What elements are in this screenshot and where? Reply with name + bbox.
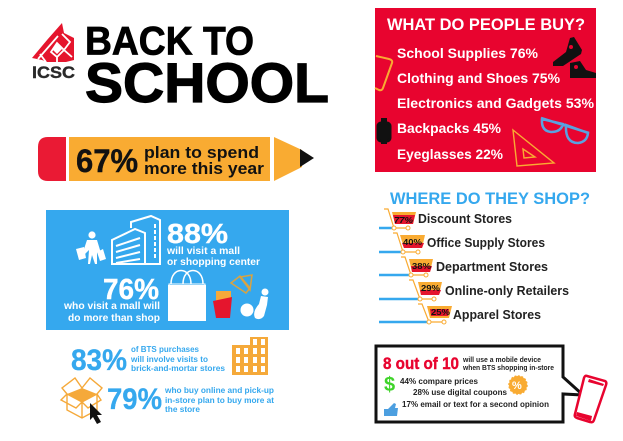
title: SCHOOL: [85, 51, 329, 114]
stat: 76%: [63, 274, 160, 324]
list of purchases: [397, 46, 594, 162]
icon: mall building: [112, 216, 160, 264]
title: [85, 20, 329, 114]
row: office supply stores 40%: [379, 233, 545, 254]
stat: 76%: do more than shop: [68, 312, 160, 324]
pencil: 67% plan to spend more this year: [38, 137, 314, 181]
icon: sneakers: [553, 37, 596, 78]
list of purchases: Backpacks 45%: [397, 121, 501, 136]
logo: ICSC: ICSC: [32, 63, 75, 82]
row: department stores 38%: Department Stores: [436, 260, 548, 274]
list of purchases: Clothing and Shoes 75%: [397, 71, 560, 86]
list of purchases: School Supplies 76%: [397, 46, 538, 61]
pencil: 67% plan to spend more this year: more this year: [144, 159, 264, 178]
row: office supply stores 40%: Office Supply Stores: [427, 236, 545, 250]
stat: 76%: 76%: [103, 274, 159, 306]
heading: WHAT DO PEOPLE BUY?: [387, 15, 585, 34]
stat: 83%: [71, 344, 225, 377]
row: discount stores 77%: Discount Stores: [418, 212, 512, 226]
pencil: 67% plan to spend more this year: plan to spend: [144, 143, 259, 162]
row: online-only retailers 29%: 29%: [421, 283, 440, 293]
icon: shopping bag: [168, 270, 206, 321]
icon: open box with cursor: [61, 378, 102, 424]
stat: 83%: brick-and-mortar stores: [131, 363, 225, 373]
panel: what do people buy: [375, 8, 596, 172]
icon: dollar: $: [384, 374, 395, 396]
stat: 79%: in-store plan to buy more at: [165, 395, 274, 405]
icon: glasses: [541, 118, 589, 143]
icon: ruler triangle: [513, 130, 554, 166]
title: BACK TO: [85, 20, 254, 64]
callout: mobile device use: when BTS shopping in-store: [462, 363, 554, 372]
stat: 88%: 88%: [167, 218, 228, 249]
stat: 8 out of 10: 8 out of 10: [383, 354, 459, 373]
icon: percent badge: %: [512, 380, 522, 392]
icon: orange building: [232, 337, 268, 375]
icon: phone: [375, 56, 392, 90]
text: second opinion: 17% email or text for a second opinion: [402, 399, 549, 409]
icon: thumbs up: [384, 403, 398, 416]
stat: 83%: 83%: [71, 344, 127, 377]
stat: 88%: or shopping center: [167, 256, 260, 268]
callout: mobile device use: [376, 346, 583, 422]
panel: mall visits: [46, 210, 289, 330]
heading: where do they shop: WHERE DO THEY SHOP?: [390, 189, 590, 208]
row: online-only retailers 29%: [379, 280, 569, 301]
stat: 76%: who visit a mall will: [63, 300, 160, 312]
logo: ICSC: [32, 23, 75, 82]
stat: 83%: will involve visits to: [130, 354, 208, 364]
stat: 83%: of BTS purchases: [131, 344, 199, 354]
text: digital coupons: 28% use digital coupons: [413, 387, 507, 397]
stat: 88%: [166, 218, 260, 268]
list of purchases: Electronics and Gadgets 53%: [397, 96, 594, 111]
list of purchases: Eyeglasses 22%: [397, 147, 503, 162]
icon: bowling: [240, 288, 268, 319]
row: apparel stores 25%: 25%: [431, 307, 450, 317]
stat: 79%: [107, 383, 274, 416]
icon: smartwatch: [378, 118, 390, 144]
row: discount stores 77%: [379, 209, 512, 230]
text: compare prices: 44% compare prices: [400, 376, 478, 386]
stat: 79%: 79%: [107, 383, 162, 416]
row: discount stores 77%: 77%: [394, 215, 413, 225]
row: apparel stores 25%: Apparel Stores: [453, 308, 541, 322]
row: department stores 38%: 38%: [412, 261, 431, 271]
row: office supply stores 40%: 40%: [403, 237, 422, 247]
stat: 79%: the store: [165, 404, 200, 414]
icon: fries: [213, 291, 232, 318]
icon: percent badge: [509, 376, 527, 394]
stat: 88%: will visit a mall: [166, 245, 240, 257]
icon: red smartphone: [575, 376, 606, 422]
icon: tickets: [231, 275, 252, 293]
stat: 79%: who buy online and pick-up: [164, 385, 274, 395]
row: online-only retailers 29%: Online-only Retailers: [445, 284, 569, 298]
pencil: 67% plan to spend more this year: 67%: [76, 143, 138, 179]
row: apparel stores 25%: [379, 304, 541, 324]
icon: shopper with bags: [76, 231, 106, 264]
row: department stores 38%: [379, 257, 548, 277]
callout: mobile device use: will use a mobile device: [462, 355, 541, 364]
